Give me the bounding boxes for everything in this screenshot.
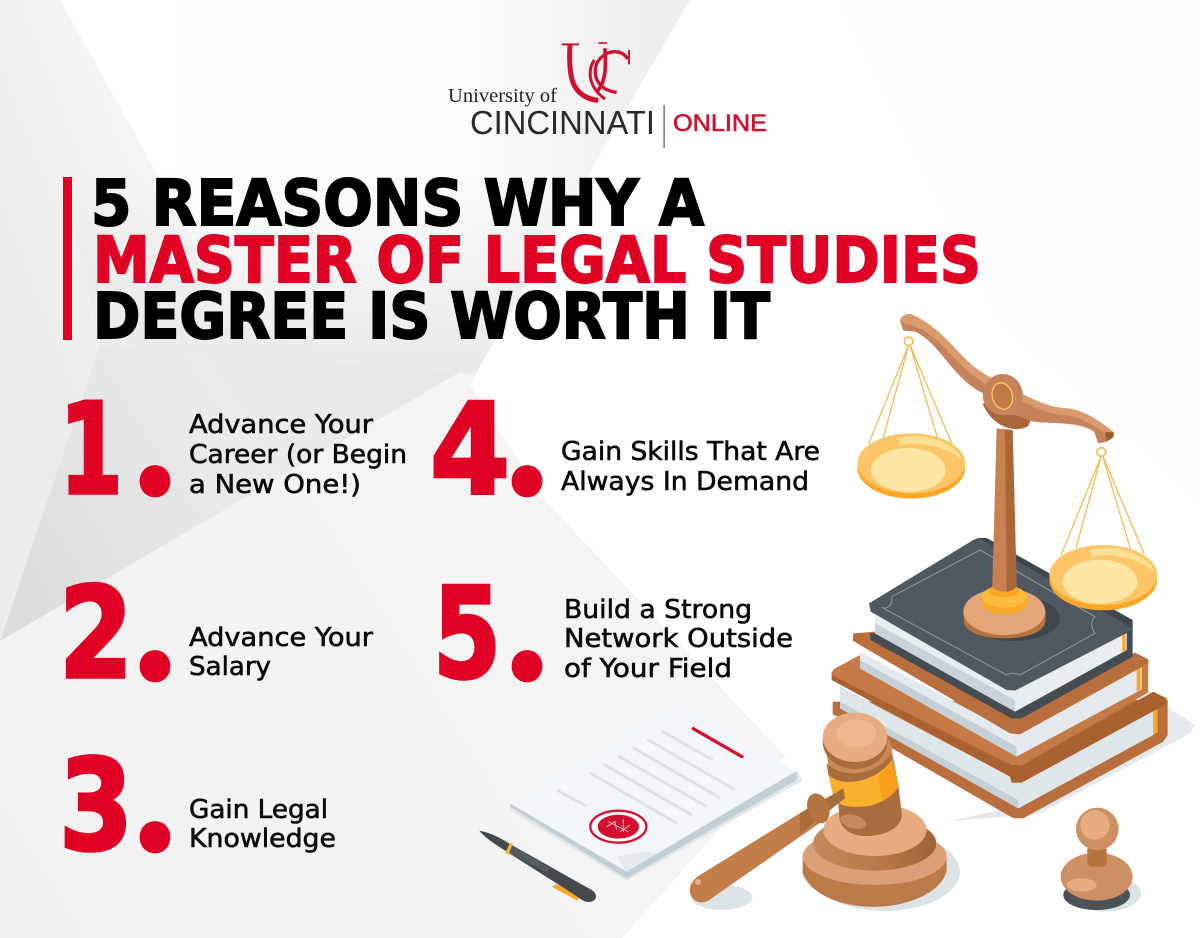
logo: University of: University of (448, 85, 557, 107)
scale column (992, 428, 1017, 592)
reason 5: 5 (433, 560, 501, 707)
reason 5 (433, 486, 793, 729)
illustration: scales of justice (857, 314, 1157, 638)
gavel handle (690, 805, 822, 910)
reason 1: Advance Your (189, 410, 373, 440)
book shadow (947, 707, 1195, 822)
illustration: gavel (690, 713, 960, 911)
reason 2: . (128, 486, 182, 729)
illustration: document with seal (510, 703, 803, 881)
reason 1: . (128, 301, 182, 544)
right chains (1061, 448, 1144, 570)
logo (448, 43, 767, 148)
reason 4: 4 (430, 376, 510, 523)
reason 1 (59, 301, 407, 544)
middle book (832, 632, 1148, 765)
reason 5: of Your Field (564, 654, 732, 684)
scale pivot (983, 400, 1031, 429)
title: 5 REASONS WHY A (91, 167, 704, 240)
reason 4: Gain Skills That Are (561, 437, 820, 467)
illustration: pen (479, 831, 596, 902)
illustration: stacked books (832, 538, 1195, 822)
title: DEGREE IS WORTH IT (93, 280, 770, 353)
gavel block and head (800, 713, 960, 911)
reason 2: 2 (59, 560, 133, 707)
right pan (1049, 545, 1157, 610)
reason 2: Salary (189, 652, 271, 682)
title accent bar (63, 177, 72, 340)
reason 4 (430, 301, 820, 544)
reason 3: Knowledge (189, 824, 336, 854)
top book (869, 538, 1133, 718)
reason 5: Build a Strong (564, 595, 752, 625)
scale base (963, 584, 1046, 638)
logo: divider (664, 105, 665, 148)
reason 4: Always In Demand (561, 467, 809, 497)
illustration: stamp (1061, 808, 1141, 912)
reason 1: a New One!) (189, 470, 361, 500)
gavel collar (800, 788, 845, 833)
reason 4: . (500, 301, 554, 544)
reason 5: . (500, 486, 554, 729)
left pan (857, 433, 965, 499)
logo: Online: ONLINE (673, 110, 767, 137)
reason 1: 1 (59, 376, 123, 523)
title (91, 167, 981, 353)
gavel head (838, 785, 902, 836)
logo: UC monogram (562, 43, 629, 100)
logo: Cincinnati: CINCINNATI (470, 104, 655, 141)
scale beam (900, 314, 1114, 443)
reason 1: Career (or Begin (189, 440, 407, 470)
reason 2 (59, 486, 373, 729)
reason 3: . (128, 657, 182, 900)
left chains (869, 337, 952, 460)
bottom book (832, 667, 1168, 818)
title: MASTER OF LEGAL STUDIES (93, 224, 981, 297)
reason 3 (59, 657, 336, 900)
reason 3: 3 (59, 732, 133, 879)
reason 2: Advance Your (189, 623, 373, 653)
reason 5: Network Outside (564, 624, 793, 654)
reason 3: Gain Legal (189, 795, 328, 825)
